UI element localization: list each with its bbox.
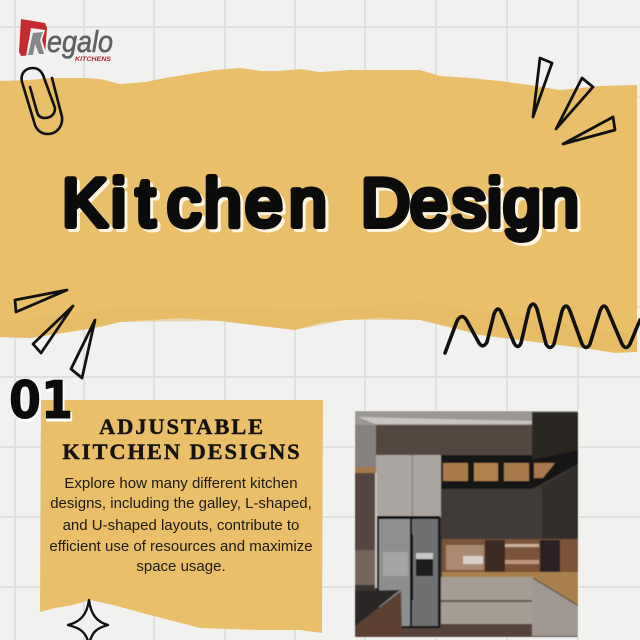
icon: paperclip xyxy=(22,68,62,134)
logo tagline: KITCHENS xyxy=(75,56,112,63)
panel heading: ADJUSTABLE xyxy=(99,414,265,439)
fridge xyxy=(377,516,440,628)
panel body text: Explore how many different kitchen xyxy=(64,475,298,492)
countertop xyxy=(442,572,578,605)
icon: spark lines top right xyxy=(533,58,615,144)
number text: 01 xyxy=(9,371,73,431)
ceiling xyxy=(355,411,578,425)
panel body text: efficient use of resources and maximize xyxy=(49,538,313,555)
left wall xyxy=(355,467,376,473)
panel: adjustable kitchen designs xyxy=(40,400,323,633)
logo mark xyxy=(19,19,47,56)
title text: Kitchen Design xyxy=(0,165,579,241)
lit glass shelves xyxy=(441,455,532,489)
kitchen photo xyxy=(354,410,579,638)
logo xyxy=(19,19,113,63)
logo wordmark: egalo xyxy=(47,24,113,59)
torn paper banner xyxy=(0,68,637,353)
title xyxy=(0,165,582,244)
panel body text xyxy=(49,475,313,575)
panel body text: and U-shaped layouts, contribute to xyxy=(63,517,299,534)
panel body text: space usage. xyxy=(136,558,226,575)
number 01 xyxy=(9,371,74,433)
title shadow: Kitchen Design xyxy=(0,168,582,244)
panel body text: designs, including the galley, L-shaped, xyxy=(50,495,312,512)
icon: zigzag squiggle xyxy=(445,304,640,353)
icon: four-point star xyxy=(68,600,108,640)
base cabinets xyxy=(441,577,533,624)
dark wall panel xyxy=(442,489,578,539)
upper cabinets xyxy=(376,425,532,456)
backsplash shelves xyxy=(442,539,578,573)
number shadow: 01 xyxy=(10,373,74,433)
tall cabinets xyxy=(376,455,441,517)
panel paper xyxy=(40,400,323,633)
icon: spark lines bottom left xyxy=(15,290,95,378)
panel: adjustable kitchen designs: KITCHEN DESIGNS xyxy=(62,439,302,464)
island xyxy=(355,590,400,626)
